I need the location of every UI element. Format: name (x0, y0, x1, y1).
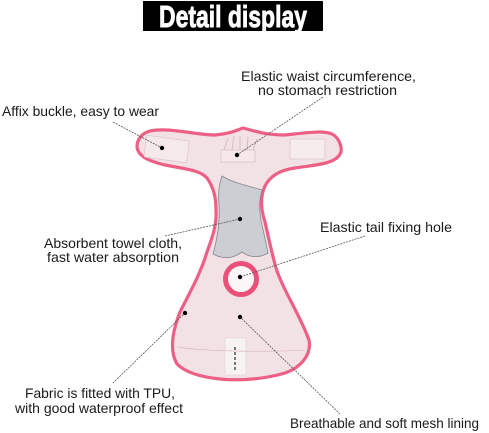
left hook patch (144, 135, 189, 163)
callout: elastic waist (235, 68, 416, 157)
callout: affix buckle: Affix buckle, easy to wear (2, 103, 159, 119)
callout: TPU fabric: Fabric is fitted with TPU, (25, 385, 175, 401)
callout: affix buckle (2, 103, 164, 150)
callout: elastic waist: no stomach restriction (258, 82, 397, 98)
diaper product illustration (137, 128, 341, 380)
callout: absorbent towel (44, 217, 242, 265)
callout: absorbent towel: fast water absorption (47, 249, 179, 265)
callout: TPU fabric (14, 311, 187, 416)
grey mesh panel (213, 176, 268, 258)
callout: elastic tail hole (238, 219, 452, 279)
bottom seam (177, 347, 305, 351)
callout: TPU fabric: with good waterproof effect (14, 400, 183, 416)
title banner: Detail display (159, 0, 308, 34)
right hook patch (290, 139, 325, 159)
callout: mesh lining: Breathable and soft mesh lining (290, 415, 479, 431)
callout: absorbent towel: Absorbent towel cloth, (44, 235, 182, 251)
callout: elastic tail hole: Elastic tail fixing hole (320, 219, 452, 235)
care label (225, 338, 246, 375)
tail hole ring (226, 264, 256, 294)
callout: mesh lining (238, 315, 479, 431)
callout: elastic waist: Elastic waist circumference, (241, 68, 416, 84)
waist elastic band (221, 136, 257, 162)
